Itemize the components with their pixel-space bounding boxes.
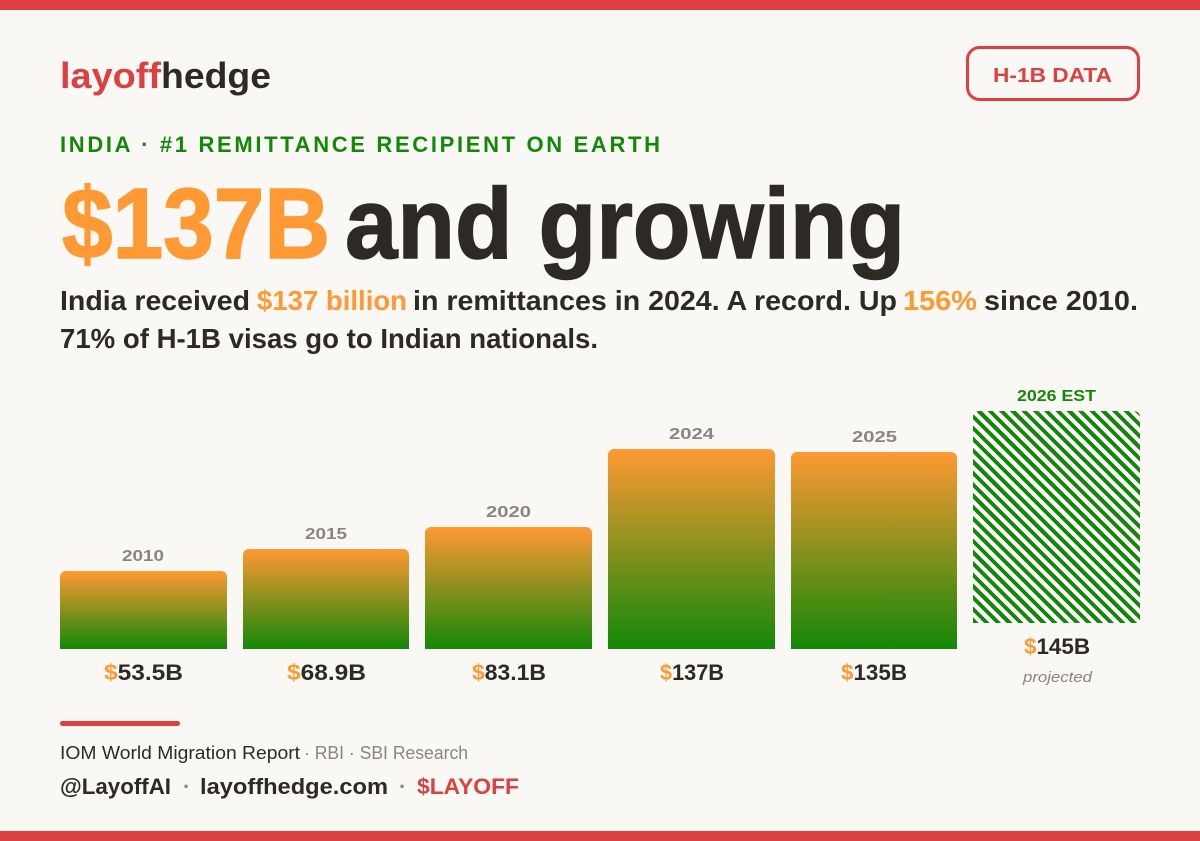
contact line: · bbox=[183, 774, 190, 799]
bar: 2026 estimate: 2026 EST bbox=[1017, 388, 1096, 405]
source line: · RBI · SBI Research bbox=[304, 743, 468, 763]
body text: 71% of H-1B visas go to Indian nationals. bbox=[60, 323, 598, 354]
headline: $137B bbox=[62, 168, 330, 280]
bar: 2024 bbox=[608, 426, 775, 685]
eyebrow heading: INDIA · #1 REMITTANCE RECIPIENT ON EARTH bbox=[60, 132, 660, 157]
headline: and growing bbox=[345, 168, 905, 280]
body text: India received bbox=[60, 285, 250, 316]
body text: $137 billion bbox=[257, 285, 407, 316]
bar chart bbox=[60, 388, 1140, 686]
contact line bbox=[60, 774, 519, 799]
source line: IOM World Migration Report bbox=[60, 743, 300, 763]
bar: 2026 estimate: $145B bbox=[1024, 634, 1090, 659]
logo: hedge bbox=[161, 55, 271, 96]
contact line: @LayoffAI bbox=[60, 774, 171, 799]
logo bbox=[60, 55, 271, 96]
contact line: layoffhedge.com bbox=[200, 774, 388, 799]
body text: in remittances in 2024. A record. Up bbox=[413, 285, 897, 316]
bar: 2026 estimate bbox=[973, 388, 1140, 686]
bar: 2025 bbox=[791, 429, 957, 685]
body text: 156% bbox=[903, 285, 977, 316]
bar: 2015: 2015 bbox=[305, 526, 347, 543]
bar: 2010: $53.5B bbox=[104, 660, 183, 685]
bar: 2025: 2025 bbox=[852, 429, 897, 446]
bar: 2025: $135B bbox=[841, 660, 907, 685]
badge: H-1B data bbox=[968, 48, 1138, 100]
bar: 2024: $137B bbox=[660, 660, 724, 685]
bar: 2020 bbox=[425, 504, 592, 685]
body text: since 2010. bbox=[984, 285, 1138, 316]
bar: 2026 estimate: projected bbox=[1022, 669, 1093, 686]
badge: H-1B data: H-1B DATA bbox=[993, 65, 1112, 87]
bar: 2015 bbox=[243, 526, 409, 685]
bar: 2015: $68.9B bbox=[287, 660, 366, 685]
bottom accent bar bbox=[0, 831, 1200, 841]
bar: 2020: $83.1B bbox=[472, 660, 546, 685]
contact line: $LAYOFF bbox=[417, 774, 519, 799]
logo: layoff bbox=[60, 55, 162, 96]
headline bbox=[62, 168, 905, 280]
bar: 2010: 2010 bbox=[122, 548, 164, 565]
body text bbox=[60, 285, 1138, 354]
top accent bar bbox=[0, 0, 1200, 10]
bar: 2024: 2024 bbox=[669, 426, 714, 443]
source line bbox=[60, 743, 468, 763]
bar: 2010 bbox=[60, 548, 227, 685]
contact line: · bbox=[399, 774, 406, 799]
bar: 2020: 2020 bbox=[486, 504, 531, 521]
footer divider bbox=[60, 721, 180, 726]
